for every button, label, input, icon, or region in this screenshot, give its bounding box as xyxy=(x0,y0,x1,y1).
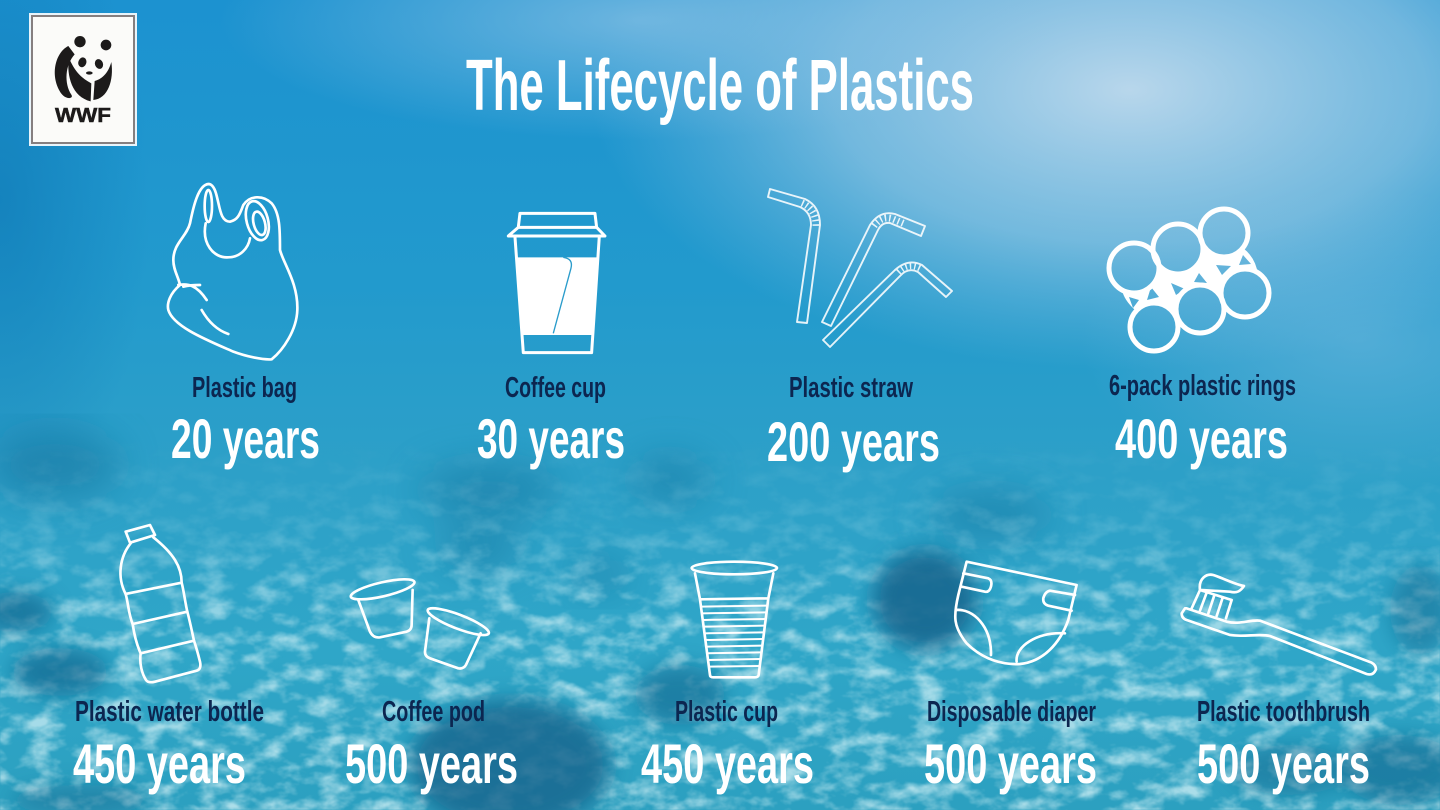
icon: diaper xyxy=(955,562,1077,664)
years: 20 years xyxy=(171,407,320,470)
title: The Lifecycle of Plastics xyxy=(466,46,974,126)
item: plastic water bottle xyxy=(73,525,264,795)
icon: panda xyxy=(55,36,112,101)
label: Coffee pod xyxy=(382,696,485,728)
item: plastic toothbrush xyxy=(1182,575,1376,795)
years: 500 years xyxy=(924,732,1097,795)
logo: WWF panda xyxy=(29,13,137,146)
item: coffee pod xyxy=(345,575,518,795)
label: Coffee cup xyxy=(505,372,606,404)
item: disposable diaper xyxy=(924,562,1097,795)
years: 400 years xyxy=(1115,407,1288,470)
years: 450 years xyxy=(73,732,246,795)
icon: plastic cup xyxy=(692,562,777,677)
icon: plastic bag xyxy=(168,184,297,359)
item: coffee cup xyxy=(477,213,625,470)
icon: toothbrush xyxy=(1182,575,1376,674)
label: Plastic cup xyxy=(675,696,778,728)
item: plastic cup xyxy=(641,562,814,795)
label: Plastic straw xyxy=(789,372,913,404)
item: 6-pack rings xyxy=(1109,209,1296,470)
label: Disposable diaper xyxy=(927,696,1096,728)
item: plastic bag xyxy=(168,184,320,470)
label: Plastic bag xyxy=(192,372,297,404)
icon: coffee cup xyxy=(508,213,605,353)
years: 30 years xyxy=(477,407,625,470)
icon: three straws xyxy=(768,189,952,347)
label: 6-pack plastic rings xyxy=(1109,370,1296,402)
label: Plastic water bottle xyxy=(75,696,264,728)
icon: bottle xyxy=(120,525,200,682)
icon: two coffee pods xyxy=(349,575,491,669)
item: plastic straw xyxy=(767,189,952,473)
icon: six-pack rings xyxy=(1109,209,1269,351)
years: 500 years xyxy=(345,732,518,795)
logo wordmark: WWF xyxy=(55,105,111,127)
years: 200 years xyxy=(767,410,940,473)
years: 450 years xyxy=(641,732,814,795)
